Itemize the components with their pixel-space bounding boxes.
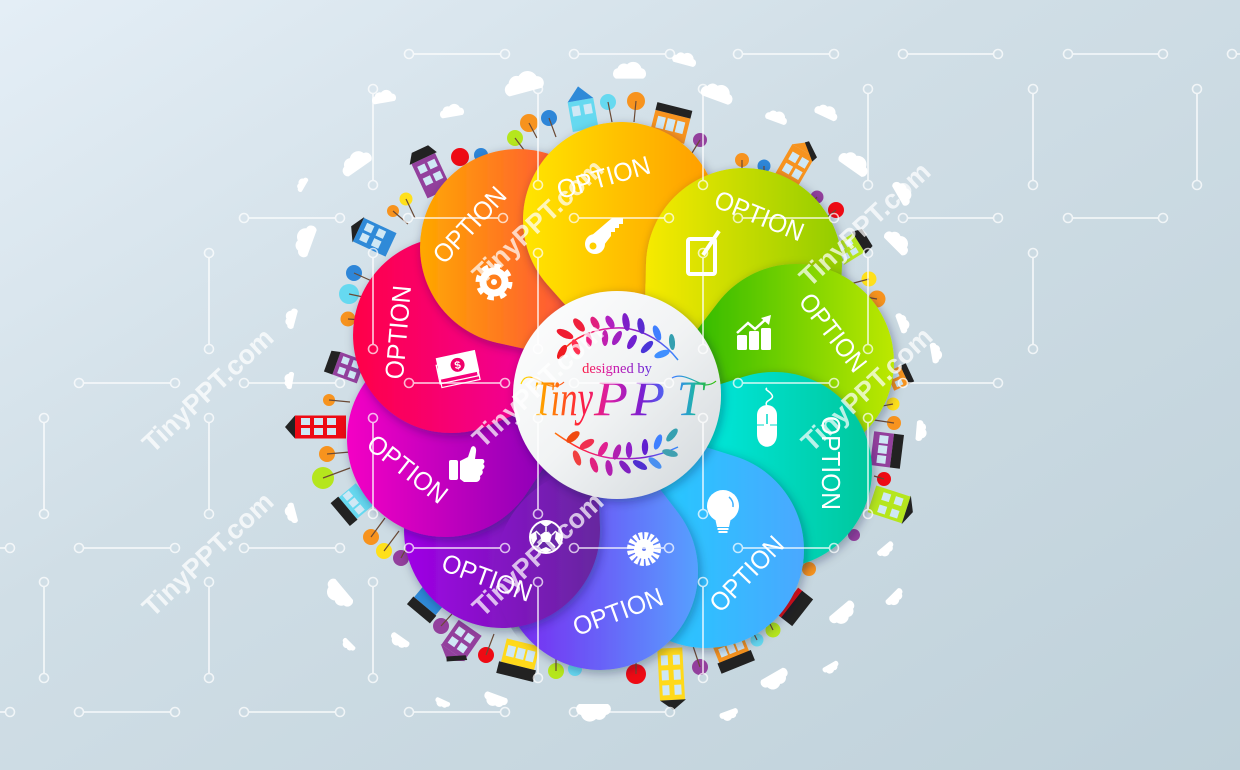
icon: key: [585, 218, 623, 254]
label: orange petal: OPTION: [426, 180, 512, 269]
watermark: bottom center: TinyPPT.com: [466, 486, 609, 623]
watermark: top center: TinyPPT.com: [466, 153, 609, 290]
watermark: left upper: TinyPPT.com: [136, 322, 279, 459]
petal: red: [325, 209, 621, 477]
logo: Tiny PPT: [521, 370, 716, 426]
icon: gear: [479, 267, 509, 297]
logo: bottom branch: [555, 427, 680, 476]
watermarks: [136, 153, 938, 623]
watermark: left lower: TinyPPT.com: [136, 486, 279, 623]
logo: Tiny PPT: Tiny: [533, 370, 594, 426]
house: red bottom right: [777, 588, 813, 626]
label: red petal: OPTION: [379, 284, 417, 380]
petal: blue: [549, 375, 840, 684]
watermark: right: TinyPPT.com: [795, 321, 938, 458]
label: purple petal: OPTION: [438, 547, 536, 608]
logo: Tiny PPT: P: [593, 370, 628, 426]
house: small purple left: [324, 349, 365, 383]
petals ring: [325, 111, 909, 684]
icon: light bulb: [707, 490, 739, 533]
petal: green: [636, 248, 909, 484]
house: blue lower left: [407, 580, 450, 623]
icon: daisy: [632, 536, 656, 562]
petal: orange: [382, 111, 681, 422]
label: blue petal: OPTION: [703, 530, 790, 618]
label: lime petal: OPTION: [710, 184, 809, 247]
icon: thumbs up: [449, 446, 485, 482]
house: cyan top: [565, 84, 598, 132]
label: teal petal: OPTION: [816, 416, 846, 510]
logo: Tiny PPT: P: [630, 370, 665, 426]
label: magenta petal: OPTION: [361, 428, 454, 510]
petal: violet: [494, 419, 710, 678]
icon: growth chart: [737, 315, 771, 350]
label: violet petal: OPTION: [569, 581, 667, 642]
house: cyan lower left: [331, 483, 374, 526]
option labels: [361, 150, 873, 642]
icon: mouse: [757, 388, 777, 447]
logo: top branch: [555, 313, 678, 361]
house: purple bottom left: [434, 619, 483, 671]
house: purple upper left: [405, 143, 453, 199]
house: red left: [285, 416, 346, 438]
petal: lime: [573, 127, 883, 438]
icon: edit pad: [688, 231, 719, 274]
trees: [312, 92, 901, 684]
petal: magenta: [326, 309, 609, 558]
petal: yellow: [520, 120, 721, 367]
house: lime upper right: [832, 226, 874, 267]
house: yellow tall: [657, 647, 686, 711]
house: blue left: [345, 214, 397, 258]
house: orange bottom right: [711, 634, 755, 674]
watermark: top right: TinyPPT.com: [793, 156, 936, 293]
label: green petal: OPTION: [793, 287, 873, 378]
logo: designed by: designed by: [582, 361, 653, 377]
petal: purple: [364, 356, 670, 668]
disc: [513, 291, 721, 499]
center disc logo: [513, 291, 721, 499]
icon: money: $: [454, 359, 462, 372]
icon: money: [435, 350, 481, 388]
watermark: center: TinyPPT.com: [466, 317, 609, 454]
icon: soccer ball: [530, 521, 562, 553]
houses: [285, 84, 918, 711]
petal: teal: [601, 320, 904, 600]
clouds: [283, 49, 943, 723]
house: orange top: [649, 102, 692, 144]
icons: [435, 218, 777, 562]
house: lime right: [867, 485, 918, 526]
house: orange small right: [886, 363, 914, 391]
house: yellow bottom: [496, 638, 542, 682]
label: yellow petal: OPTION: [553, 150, 654, 205]
house: purple right: [870, 431, 904, 469]
logo: Tiny PPT: T: [677, 370, 706, 426]
house: orange upper right: [774, 135, 822, 189]
